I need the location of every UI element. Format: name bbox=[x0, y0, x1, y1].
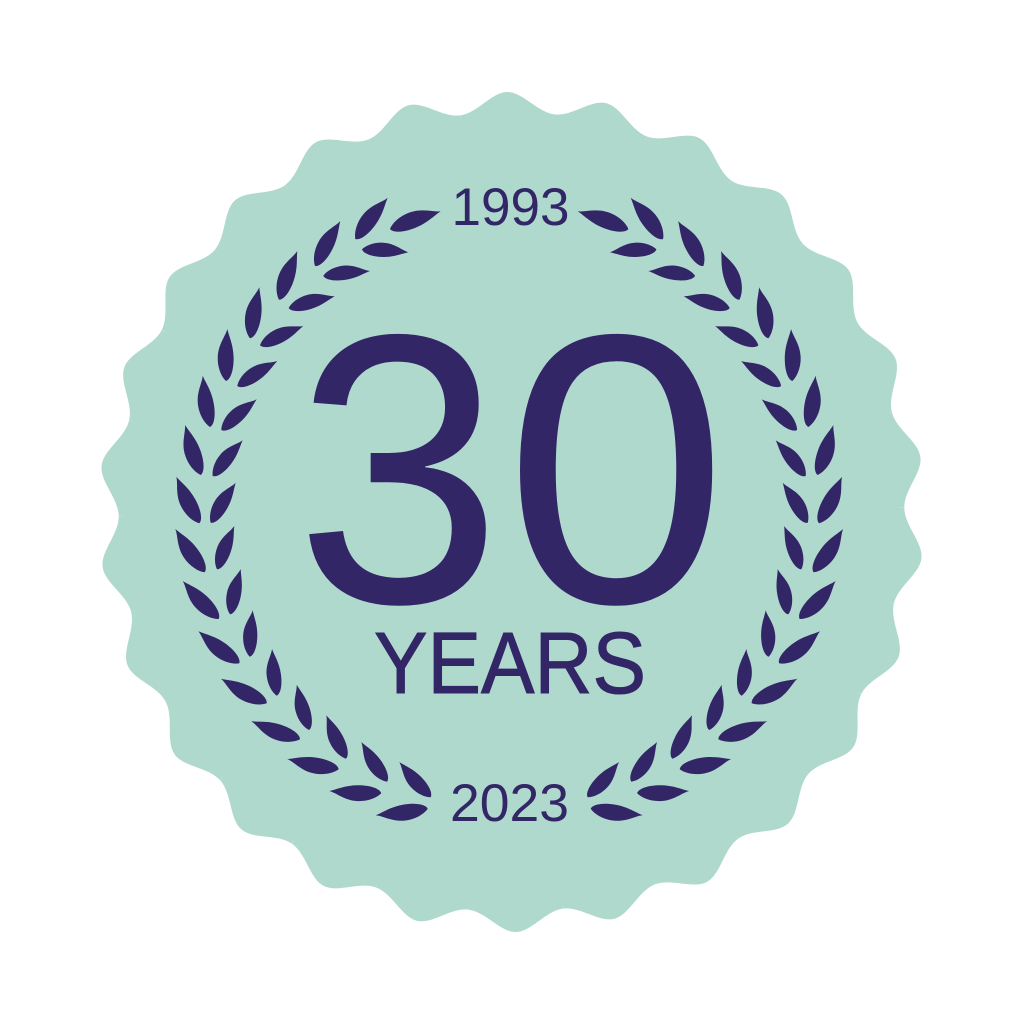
text: end year 2023: 2023 bbox=[450, 774, 569, 833]
heading: large number 30: 0 bbox=[504, 255, 728, 684]
icon: left laurel branch bbox=[168, 192, 443, 824]
heading: large number 30 bbox=[295, 255, 728, 684]
text: start year 1993: 1993 bbox=[452, 178, 570, 237]
badge: wavy scalloped seal bbox=[92, 88, 931, 936]
heading: large number 30: 3 bbox=[295, 256, 502, 684]
icon: right laurel branch bbox=[575, 192, 850, 824]
text: YEARS: YEARS bbox=[374, 615, 646, 712]
